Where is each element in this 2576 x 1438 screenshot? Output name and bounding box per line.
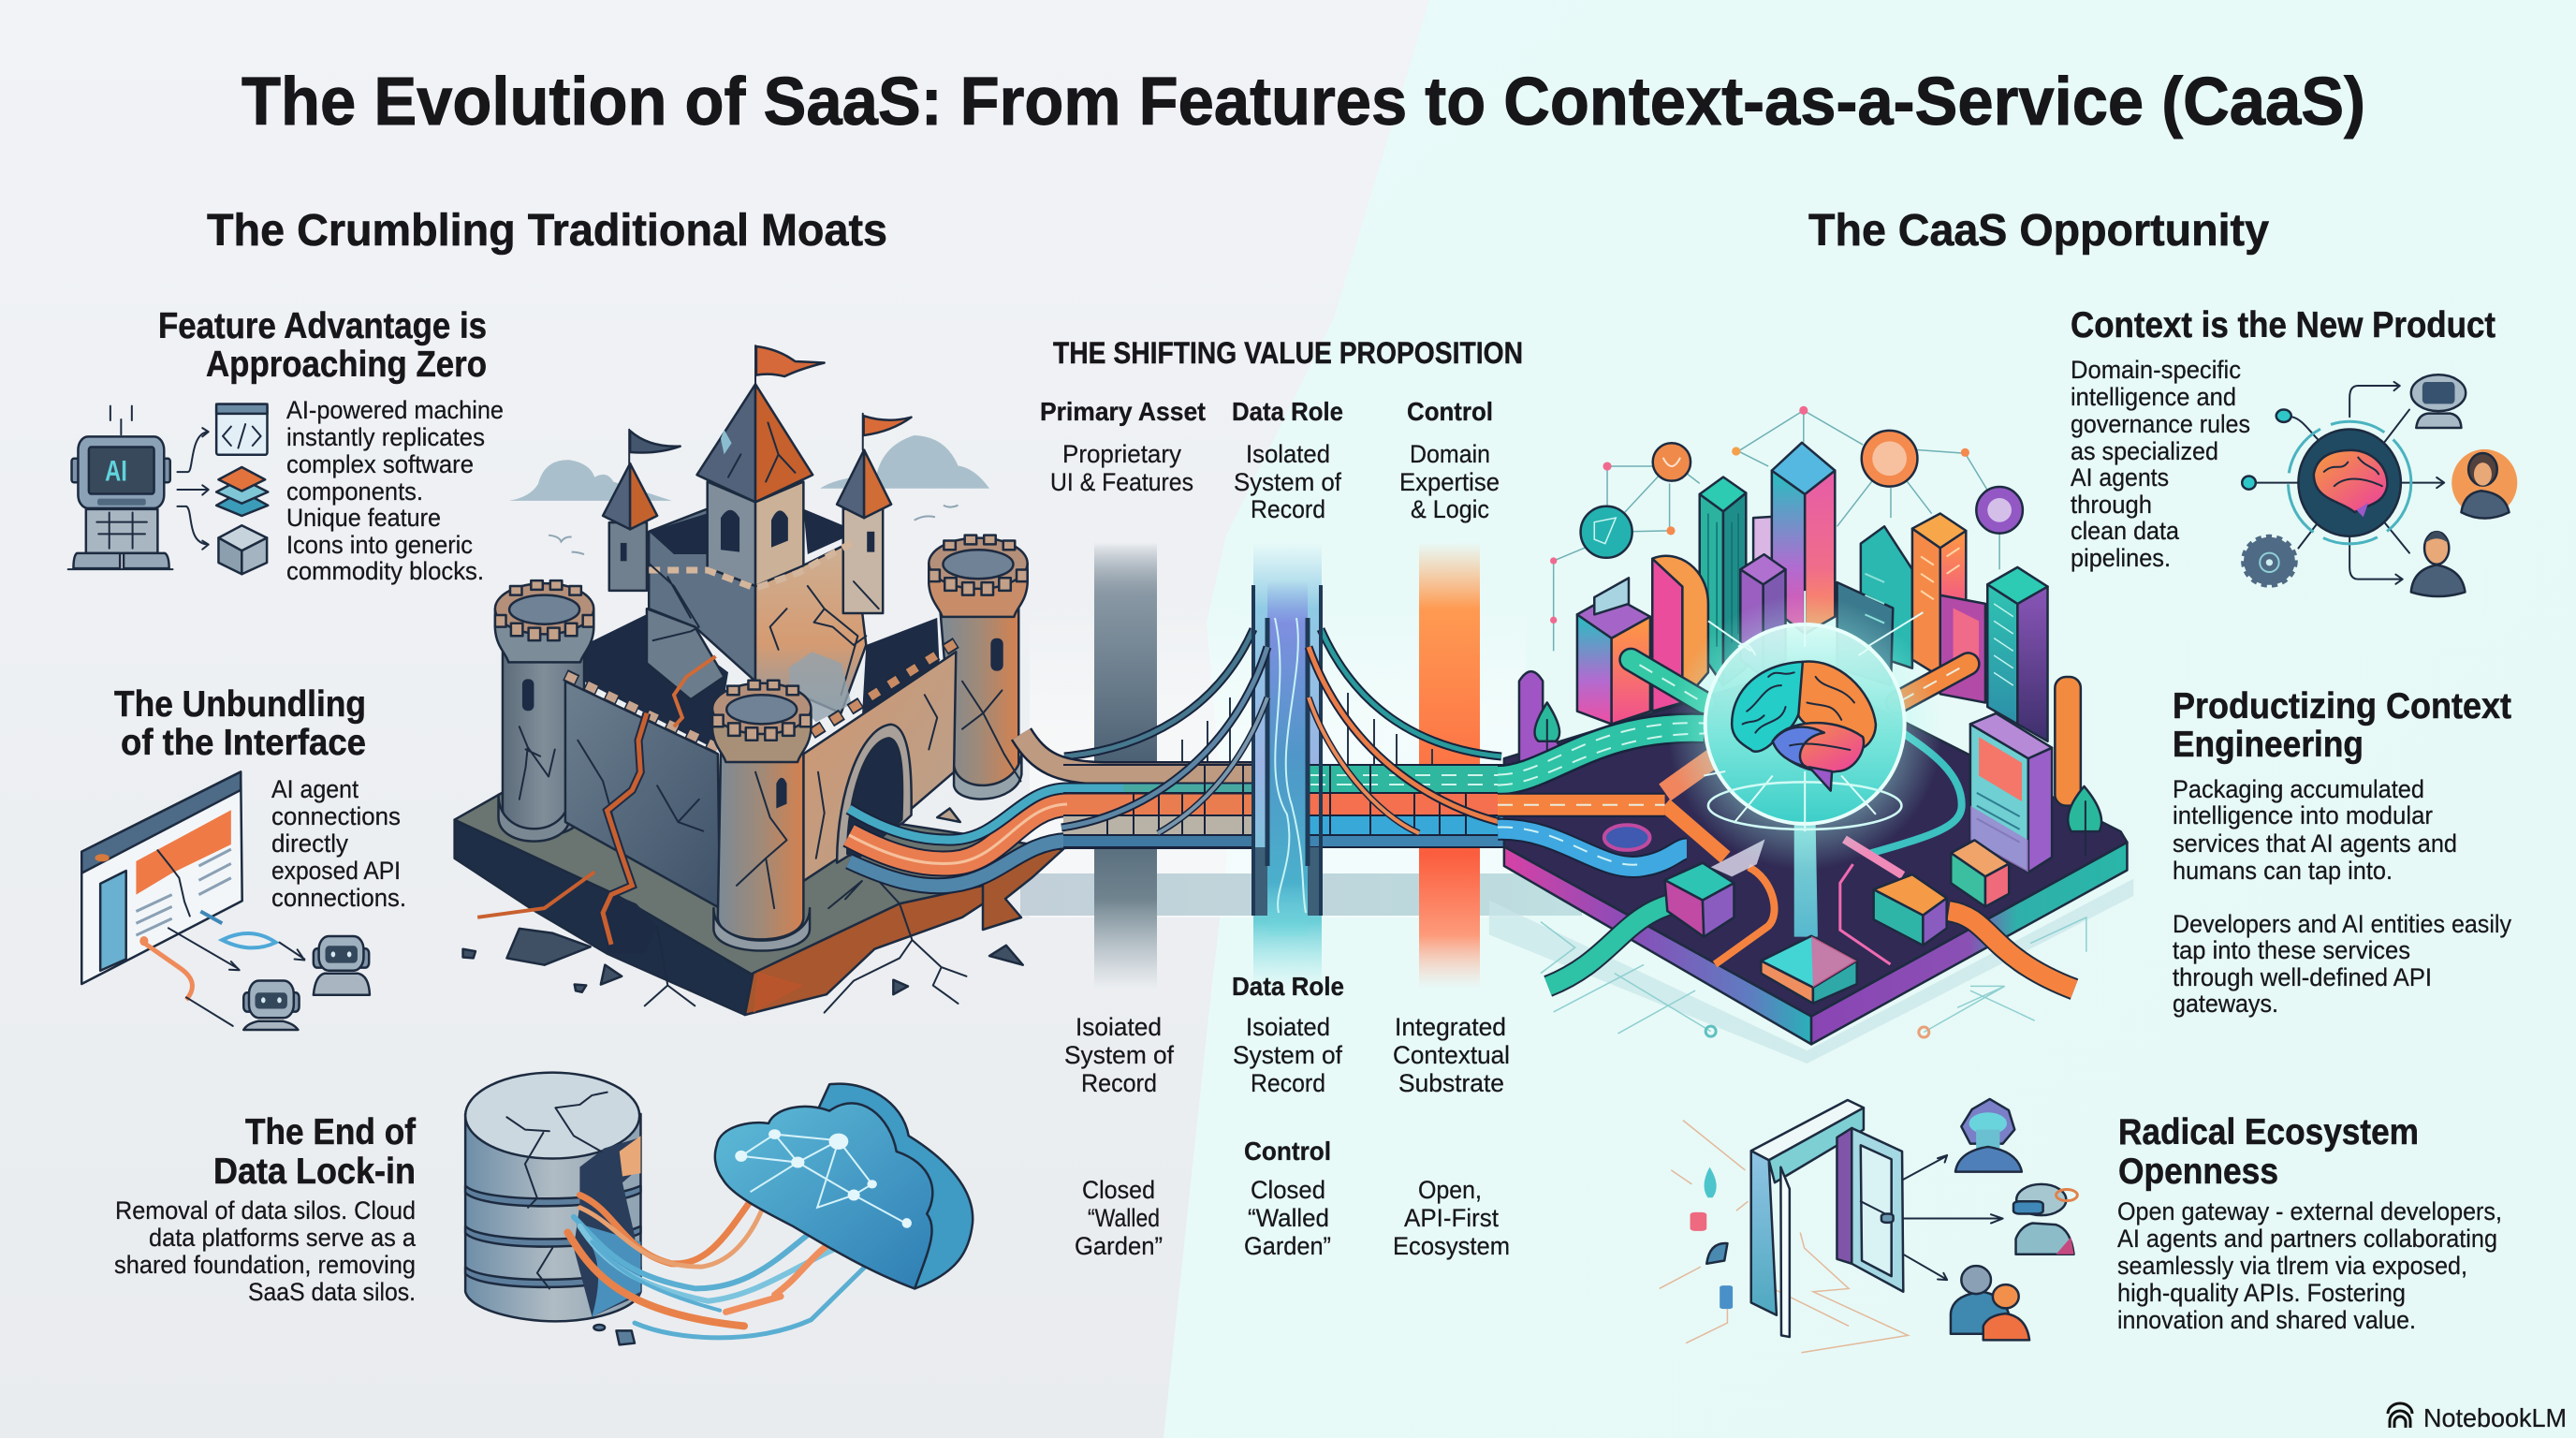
productizing text 1: Packaging accumulated xyxy=(2173,775,2424,803)
productizing text 1: intelligence into modular xyxy=(2173,801,2433,829)
panel: context is the new product xyxy=(2071,305,2517,596)
birds xyxy=(549,506,959,554)
radical heading: Radical Ecosystem xyxy=(2118,1112,2419,1152)
lower table: data role row: Isoiated xyxy=(1246,1013,1330,1041)
robot agent right xyxy=(314,936,370,995)
panel: the shifting value proposition xyxy=(1020,336,1582,1260)
unbundling text: connections. xyxy=(271,884,406,912)
background: left traditional panel xyxy=(0,0,1429,1438)
broken base platform xyxy=(455,793,1062,1015)
context text: pipelines. xyxy=(2071,544,2171,572)
panel: unbundling of the interface xyxy=(81,684,406,1030)
lower table: data role row: Substrate xyxy=(1398,1069,1504,1097)
deck grid lines xyxy=(1063,765,1535,847)
back walls and dark voids xyxy=(584,509,939,749)
radical text: seamlessly via tlrem via exposed, xyxy=(2117,1252,2467,1280)
productizing text 2: gateways. xyxy=(2173,990,2278,1018)
partner AI figure xyxy=(2013,1184,2077,1255)
lower table: data role row: System of xyxy=(1233,1041,1342,1069)
productizing text 2: through well-defined API xyxy=(2173,963,2432,991)
feature advantage text: AI-powered machine xyxy=(286,396,504,424)
data lock-in text xyxy=(114,1196,417,1306)
panel: end of data lock-in xyxy=(114,1073,973,1344)
glass shard xyxy=(1711,839,1764,876)
lower table: control row: Control xyxy=(1244,1137,1331,1166)
central keep xyxy=(649,345,852,588)
bridge backdrop haze xyxy=(1030,599,1526,917)
pipeline: blue left xyxy=(849,841,1254,886)
unbundling text: AI agent xyxy=(271,775,359,803)
context text: governance rules xyxy=(2071,410,2250,438)
lower table: control row: Closed xyxy=(1082,1176,1155,1204)
productizing text 1: services that AI agents and xyxy=(2173,829,2457,858)
icon: AI machine replicating components xyxy=(68,404,268,574)
data lock-in heading: Data Lock-in xyxy=(213,1152,416,1192)
unbundling text: connections xyxy=(271,802,401,830)
unbundling heading xyxy=(114,684,366,763)
upper table: Control xyxy=(1407,397,1493,426)
person suit xyxy=(2411,532,2465,596)
icon: AI machine replicating components: AI xyxy=(105,454,127,487)
front left wall xyxy=(565,675,720,908)
upper table: Expertise xyxy=(1399,468,1500,496)
unbundling heading: of the Interface xyxy=(121,723,366,763)
icon: broken interface with agents xyxy=(81,771,370,1030)
lower table: data role row: Record xyxy=(1081,1069,1157,1097)
front server building xyxy=(1970,713,2052,873)
icon: brain hub connecting agents and people xyxy=(2242,374,2517,596)
lower table: control row: Garden” xyxy=(1075,1232,1163,1260)
lower table: control row: “Walled xyxy=(1248,1204,1329,1232)
broken ground under bridge xyxy=(983,847,1063,930)
lower table: control row: Garden” xyxy=(1244,1232,1331,1260)
debris rocks xyxy=(463,808,1023,994)
lower table: control row: Closed xyxy=(1251,1176,1325,1204)
pipeline: orange left xyxy=(849,804,1254,864)
right tower xyxy=(929,536,1028,800)
logo: NotebookLM: NotebookLM xyxy=(2423,1403,2567,1432)
network nodes and links xyxy=(1550,406,2023,651)
upper table: UI & Features xyxy=(1050,468,1193,496)
large orange crack xyxy=(603,713,647,945)
ground node circles xyxy=(1705,1026,1929,1037)
context text: intelligence and xyxy=(2071,383,2236,411)
column: primary asset gradient bar xyxy=(1094,542,1157,989)
feature advantage heading: Approaching Zero xyxy=(206,345,487,385)
glowing orb xyxy=(1667,591,1942,870)
person orange xyxy=(2452,449,2517,519)
right turret with flag xyxy=(837,414,912,613)
panel: radical ecosystem openness xyxy=(1660,1099,2502,1353)
lower table: control row: Ecosystem xyxy=(1393,1232,1510,1260)
productizing text 2 xyxy=(2173,910,2511,1018)
lower table: control row: “Walled xyxy=(1088,1204,1160,1232)
feature advantage text: instantly replicates xyxy=(286,423,485,451)
lower table: data role row: Integrated xyxy=(1395,1013,1506,1041)
upper table: Proprietary xyxy=(1062,440,1181,468)
productizing heading: Engineering xyxy=(2173,725,2364,765)
unbundling text: exposed API xyxy=(271,857,401,885)
left turret with flag xyxy=(603,430,681,591)
bridge front cables right xyxy=(1309,647,1527,833)
feature advantage text: commodity blocks. xyxy=(286,557,484,585)
productizing text 1: humans can tap into. xyxy=(2173,857,2393,885)
upper table: Data Role xyxy=(1232,397,1343,426)
data lock-in text: Removal of data silos. Cloud xyxy=(115,1196,416,1225)
feature advantage text: Unique feature xyxy=(286,504,441,532)
lower table: data role row: Contextual xyxy=(1393,1041,1510,1069)
illustration: crumbling castle xyxy=(455,345,1062,1015)
lower table: data role row: Record xyxy=(1251,1069,1325,1097)
productizing heading xyxy=(2173,686,2511,765)
background: right CaaS panel xyxy=(1164,0,2576,1438)
data lock-in text: data platforms serve as a xyxy=(149,1224,417,1252)
lower table: data role row: System of xyxy=(1064,1041,1174,1069)
feature advantage text: Icons into generic xyxy=(286,531,473,559)
lower table: data role row xyxy=(1064,972,1510,1097)
lower table: data role row: Data Role xyxy=(1232,972,1344,1001)
data lock-in text: shared foundation, removing xyxy=(114,1251,416,1279)
panel: feature advantage xyxy=(68,306,504,585)
context text: through xyxy=(2071,491,2152,519)
icon: cracked database flowing to cloud xyxy=(465,1073,973,1344)
front right wall with gate arch xyxy=(803,643,956,881)
gear xyxy=(2244,537,2295,585)
bridge rear cables xyxy=(1064,629,1253,756)
productizing text 2: tap into these services xyxy=(2173,936,2410,964)
radical text xyxy=(2117,1197,2502,1334)
feature advantage text xyxy=(286,396,504,585)
beam base block xyxy=(1761,936,1857,1004)
left purple cylinder and tree xyxy=(1519,671,1562,763)
lower table: control row xyxy=(1075,1137,1510,1260)
cracks in keep xyxy=(649,564,879,695)
front tower xyxy=(712,681,811,951)
clouds xyxy=(509,435,989,501)
context text: as specialized xyxy=(2071,437,2218,465)
feature advantage text: complex software xyxy=(286,450,474,478)
ground band xyxy=(1020,873,1582,916)
context text: clean data xyxy=(2071,517,2180,545)
upper table: Domain xyxy=(1410,440,1490,468)
partner people xyxy=(1951,1266,2029,1340)
unbundling text: directly xyxy=(271,829,348,858)
productizing text 1 xyxy=(2173,775,2457,885)
upper table: Primary Asset xyxy=(1040,397,1206,426)
feature advantage heading xyxy=(158,306,487,385)
central tower column xyxy=(1253,580,1321,936)
board roads xyxy=(1498,723,2074,990)
context text: Domain-specific xyxy=(2071,356,2241,384)
context text: AI agents xyxy=(2071,463,2169,492)
data lock-in heading xyxy=(213,1112,417,1192)
robot agent left xyxy=(243,980,300,1030)
small modules on board xyxy=(1665,840,2009,946)
panel: productizing context engineering xyxy=(2173,686,2511,1018)
title: The Evolution of SaaS: From Features to Context-as-a-Service (CaaS) xyxy=(242,65,2365,139)
lower table: control row: Open, xyxy=(1418,1176,1482,1204)
context text xyxy=(2071,356,2250,572)
radical text: AI agents and partners collaborating xyxy=(2117,1225,2497,1253)
value proposition heading: THE SHIFTING VALUE PROPOSITION xyxy=(1053,336,1523,370)
light beam xyxy=(1794,823,1818,937)
context heading: Context is the New Product xyxy=(2071,305,2496,345)
productizing text 2: Developers and AI entities easily xyxy=(2173,910,2511,938)
lower table: control row: API-First xyxy=(1404,1204,1499,1232)
heading: the CaaS opportunity: The CaaS Opportunity xyxy=(1808,206,2269,256)
partner gear figure xyxy=(1955,1099,2022,1172)
rear hangers xyxy=(1182,693,1432,765)
upper table xyxy=(1040,397,1500,523)
data lock-in text: SaaS data silos. xyxy=(248,1278,416,1306)
upper table: System of xyxy=(1234,468,1341,496)
right orange cylinder and tree xyxy=(2055,677,2101,855)
upper table: Isolated xyxy=(1246,440,1330,468)
platform shadow xyxy=(1489,879,2133,1064)
radical heading: Openness xyxy=(2118,1152,2278,1192)
icon: open door with ecosystem partners xyxy=(1660,1099,2077,1353)
data lock-in heading: The End of xyxy=(245,1112,417,1152)
unbundling text xyxy=(271,775,406,912)
right teal ring road xyxy=(1866,730,1962,855)
pipeline: teal left xyxy=(849,788,1254,840)
deck left rows xyxy=(1063,785,1254,847)
platform top xyxy=(1504,668,2127,1017)
illustration: bridge of data pipelines xyxy=(849,580,1535,936)
skyline buildings xyxy=(1577,443,2048,741)
platform sides xyxy=(1504,843,2127,1044)
upper table: Record xyxy=(1251,495,1325,523)
left tan road xyxy=(1021,734,1254,773)
pipes entering buildings xyxy=(1631,660,1969,702)
lower table: data role row: Isoiated xyxy=(1076,1013,1162,1041)
column: data role gradient bar xyxy=(1253,542,1322,989)
column: control gradient bar xyxy=(1419,542,1480,989)
deck right rows xyxy=(1308,765,1527,847)
feature advantage heading: Feature Advantage is xyxy=(158,306,487,346)
illustration: context city with glowing brain xyxy=(1489,406,2133,1064)
radical text: high-quality APIs. Fostering xyxy=(2117,1279,2406,1307)
radical text: Open gateway - external developers, xyxy=(2117,1197,2502,1225)
radical heading xyxy=(2118,1112,2419,1192)
upper table: & Logic xyxy=(1411,495,1489,523)
bridge front cables left xyxy=(1061,647,1267,833)
robot xyxy=(2411,374,2466,428)
circuit lines on ground xyxy=(1541,917,2086,1034)
heading: the crumbling traditional moats: The Crumbling Traditional Moats xyxy=(207,206,887,256)
radical text: innovation and shared value. xyxy=(2117,1306,2416,1334)
brain xyxy=(1732,661,1876,791)
productizing heading: Productizing Context xyxy=(2173,686,2511,726)
feature advantage text: components. xyxy=(286,477,423,506)
left tower xyxy=(495,580,593,842)
unbundling heading: The Unbundling xyxy=(114,684,366,725)
